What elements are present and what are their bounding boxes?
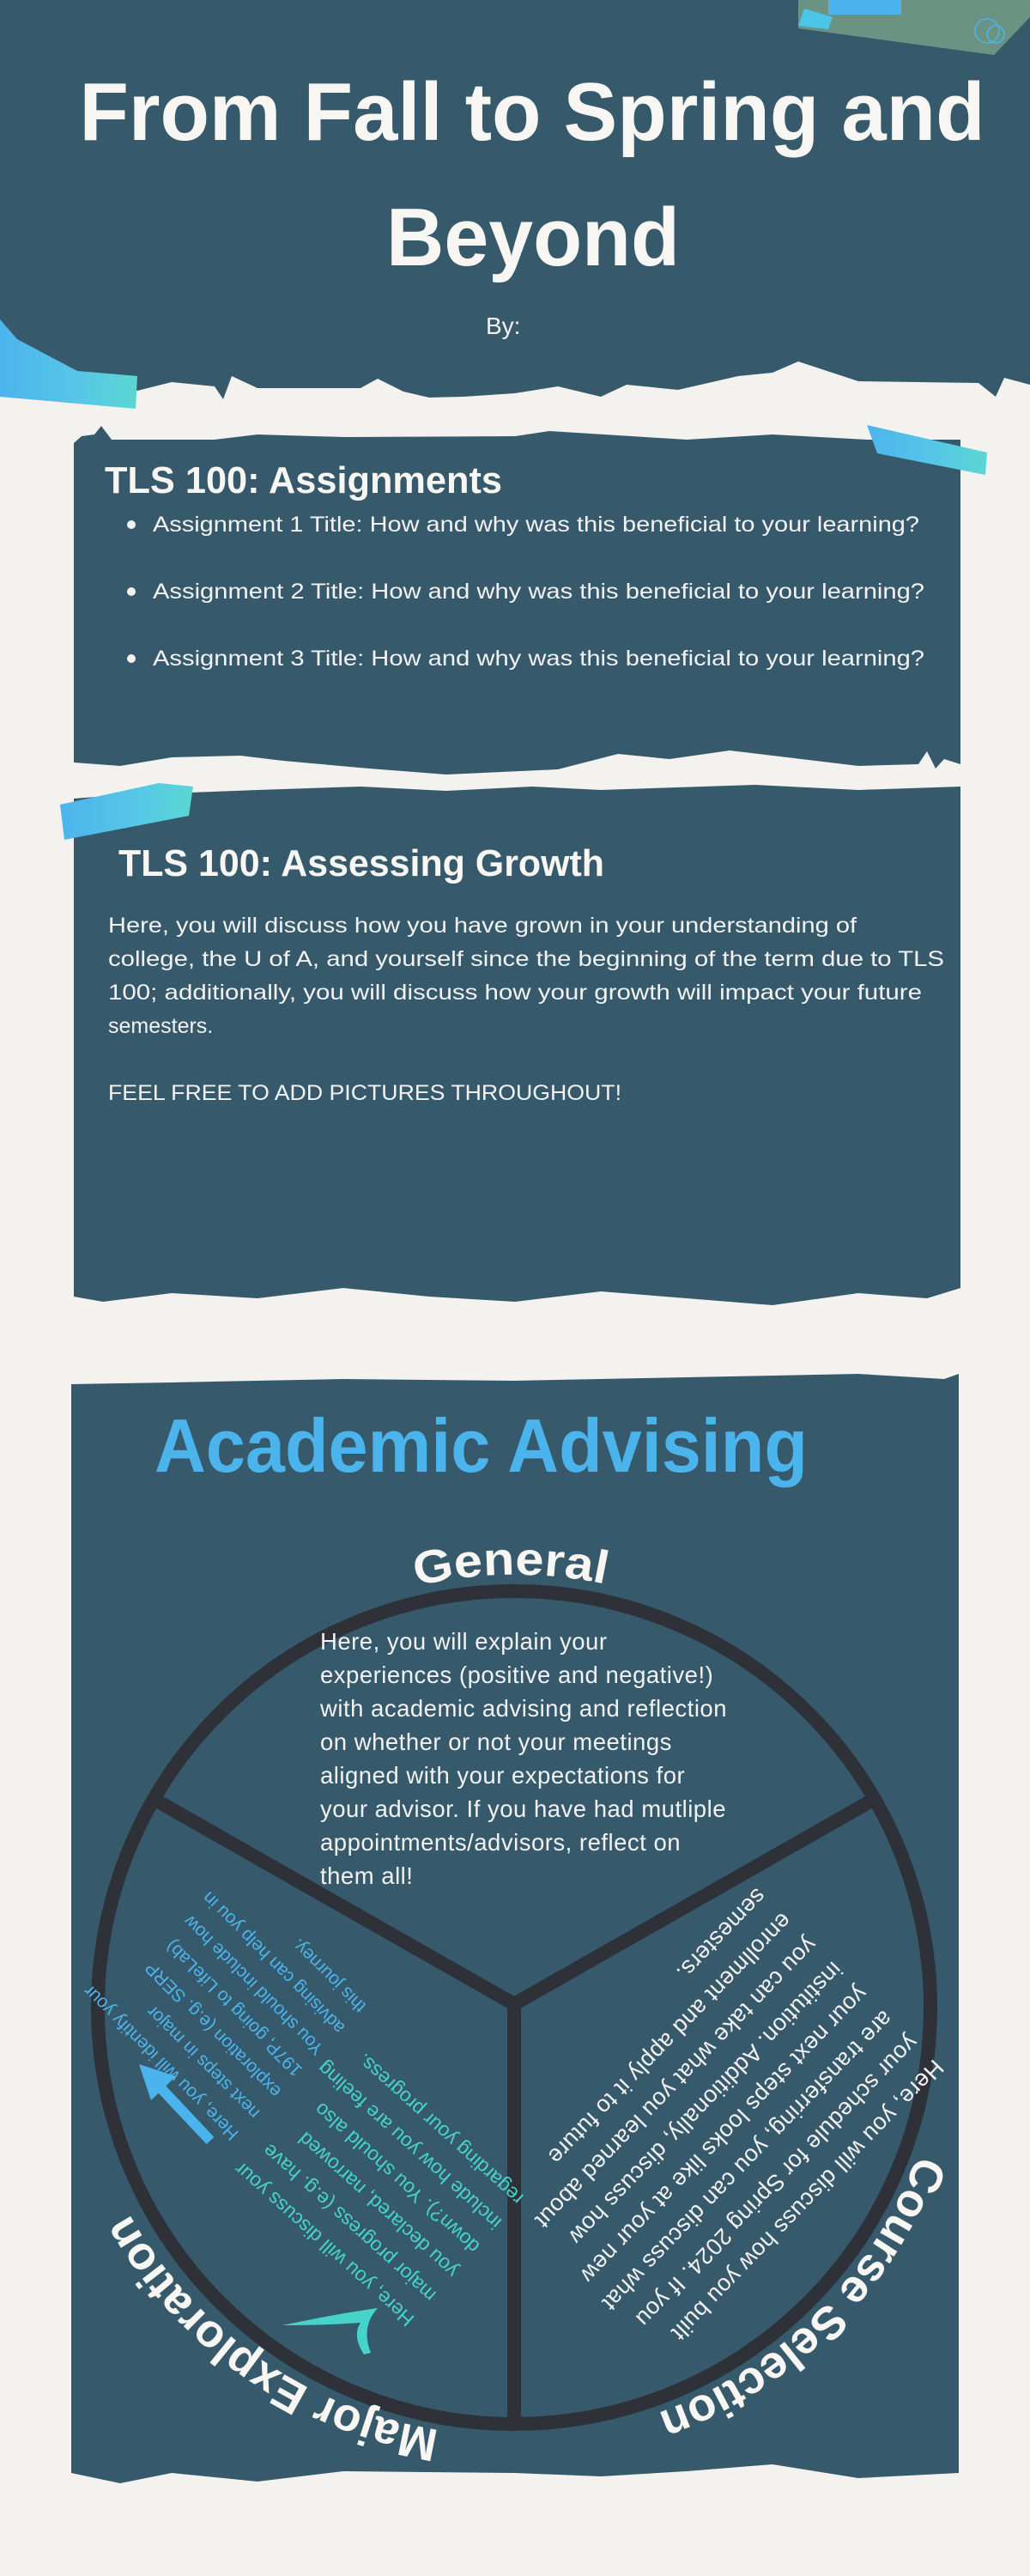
text: general: them all! <box>320 1862 413 1889</box>
bullet list: Assignment 3 Title: How and why was this beneficial to your learning? <box>153 647 924 671</box>
text: next steps: advising can help you in <box>199 1887 348 2038</box>
panel: academic advising <box>71 1374 959 2483</box>
title: From Fall to Spring and <box>79 66 985 158</box>
label: general: General <box>415 1549 609 1583</box>
text: major progress: include how you are feeling <box>313 2057 506 2234</box>
text: course selection: you can take what you learned about <box>530 1932 822 2233</box>
body text: Here, you will discuss how you have grown in your understanding of <box>108 914 857 938</box>
body text <box>108 914 944 1105</box>
label: major exploration: Major Exploration <box>112 2216 436 2461</box>
text: course selection: semesters. <box>671 1883 772 1986</box>
tape: panel 1 <box>867 425 987 475</box>
bullet list <box>127 513 924 671</box>
text: course selection: enrollment and apply it to future <box>543 1908 797 2170</box>
text: general: aligned with your expectations for <box>320 1762 685 1789</box>
text: general: appointments/advisors, reflect on <box>320 1829 681 1856</box>
text: next steps <box>80 1854 370 2144</box>
text: next steps: exploration (e.g. SERP <box>142 1958 285 2101</box>
title: Beyond <box>386 191 680 283</box>
text: major progress: Here, you will discuss your <box>229 2158 418 2331</box>
text: next steps: Here, you will identify your <box>80 1981 243 2144</box>
tape: top right <box>798 0 1030 55</box>
text: general: experiences (positive and negative!) <box>320 1662 713 1688</box>
panel: assessing growth <box>60 783 960 1305</box>
text: course selection: your schedule for Spring 2024. If you <box>631 2030 924 2332</box>
body text: semesters. <box>108 1014 213 1038</box>
text: course selection: are transferring, you can discuss what <box>597 2006 898 2316</box>
text: major progress: down?). You should also <box>310 2099 484 2258</box>
text: major progress <box>226 2033 527 2331</box>
text: course selection: Here, you will discuss how you built <box>666 2055 948 2346</box>
text: major progress: regarding your progress. <box>353 2049 527 2209</box>
icon: teal check <box>282 2308 378 2354</box>
tape: panel 2 <box>60 783 193 840</box>
text: general: your advisor. If you have had mutliple <box>320 1795 726 1822</box>
heading: assessing growth: TLS 100: Assessing Growth <box>118 842 604 884</box>
arrow: blue <box>139 2064 210 2141</box>
text: major progress: major progress (e.g. have <box>258 2140 440 2306</box>
header banner <box>0 0 1030 399</box>
body text: college, the U of A, and yourself since the beginning of the term due to TLS <box>108 947 944 971</box>
panel: assignments <box>74 425 987 775</box>
text: next steps: next steps in major <box>142 2002 264 2123</box>
heading: assignments: TLS 100: Assignments <box>105 459 502 501</box>
text: course selection: institution. Additionally, discuss how <box>564 1957 847 2250</box>
text: general <box>319 1628 727 1889</box>
text: course selection: your next steps looks like at your new <box>575 1981 873 2288</box>
text: course selection <box>470 1883 948 2365</box>
bullet list: Assignment 2 Title: How and why was this beneficial to your learning? <box>153 580 924 604</box>
body text: FEEL FREE TO ADD PICTURES THROUGHOUT! <box>108 1081 621 1105</box>
pie chart circle <box>98 1591 930 2427</box>
text: next steps: 197P, going to LifeLab) <box>162 1936 306 2080</box>
text: general: Here, you will explain your <box>320 1628 607 1655</box>
tape: left <box>0 319 137 409</box>
heading: academic advising: Academic Advising <box>154 1403 808 1488</box>
title <box>79 66 985 283</box>
text: general: with academic advising and reflection <box>319 1695 727 1722</box>
text: general: on whether or not your meetings <box>320 1728 672 1755</box>
byline: By: <box>486 313 520 339</box>
label: course selection: Course Selection <box>660 2160 942 2433</box>
bullet list: Assignment 1 Title: How and why was this beneficial to your learning? <box>153 513 919 537</box>
body text: 100; additionally, you will discuss how your growth will impact your future <box>108 981 922 1005</box>
text: major progress: you declared, narrowed <box>294 2128 462 2282</box>
text: next steps: this journey. <box>288 1935 370 2016</box>
text: next steps: You should include how <box>179 1911 328 2059</box>
